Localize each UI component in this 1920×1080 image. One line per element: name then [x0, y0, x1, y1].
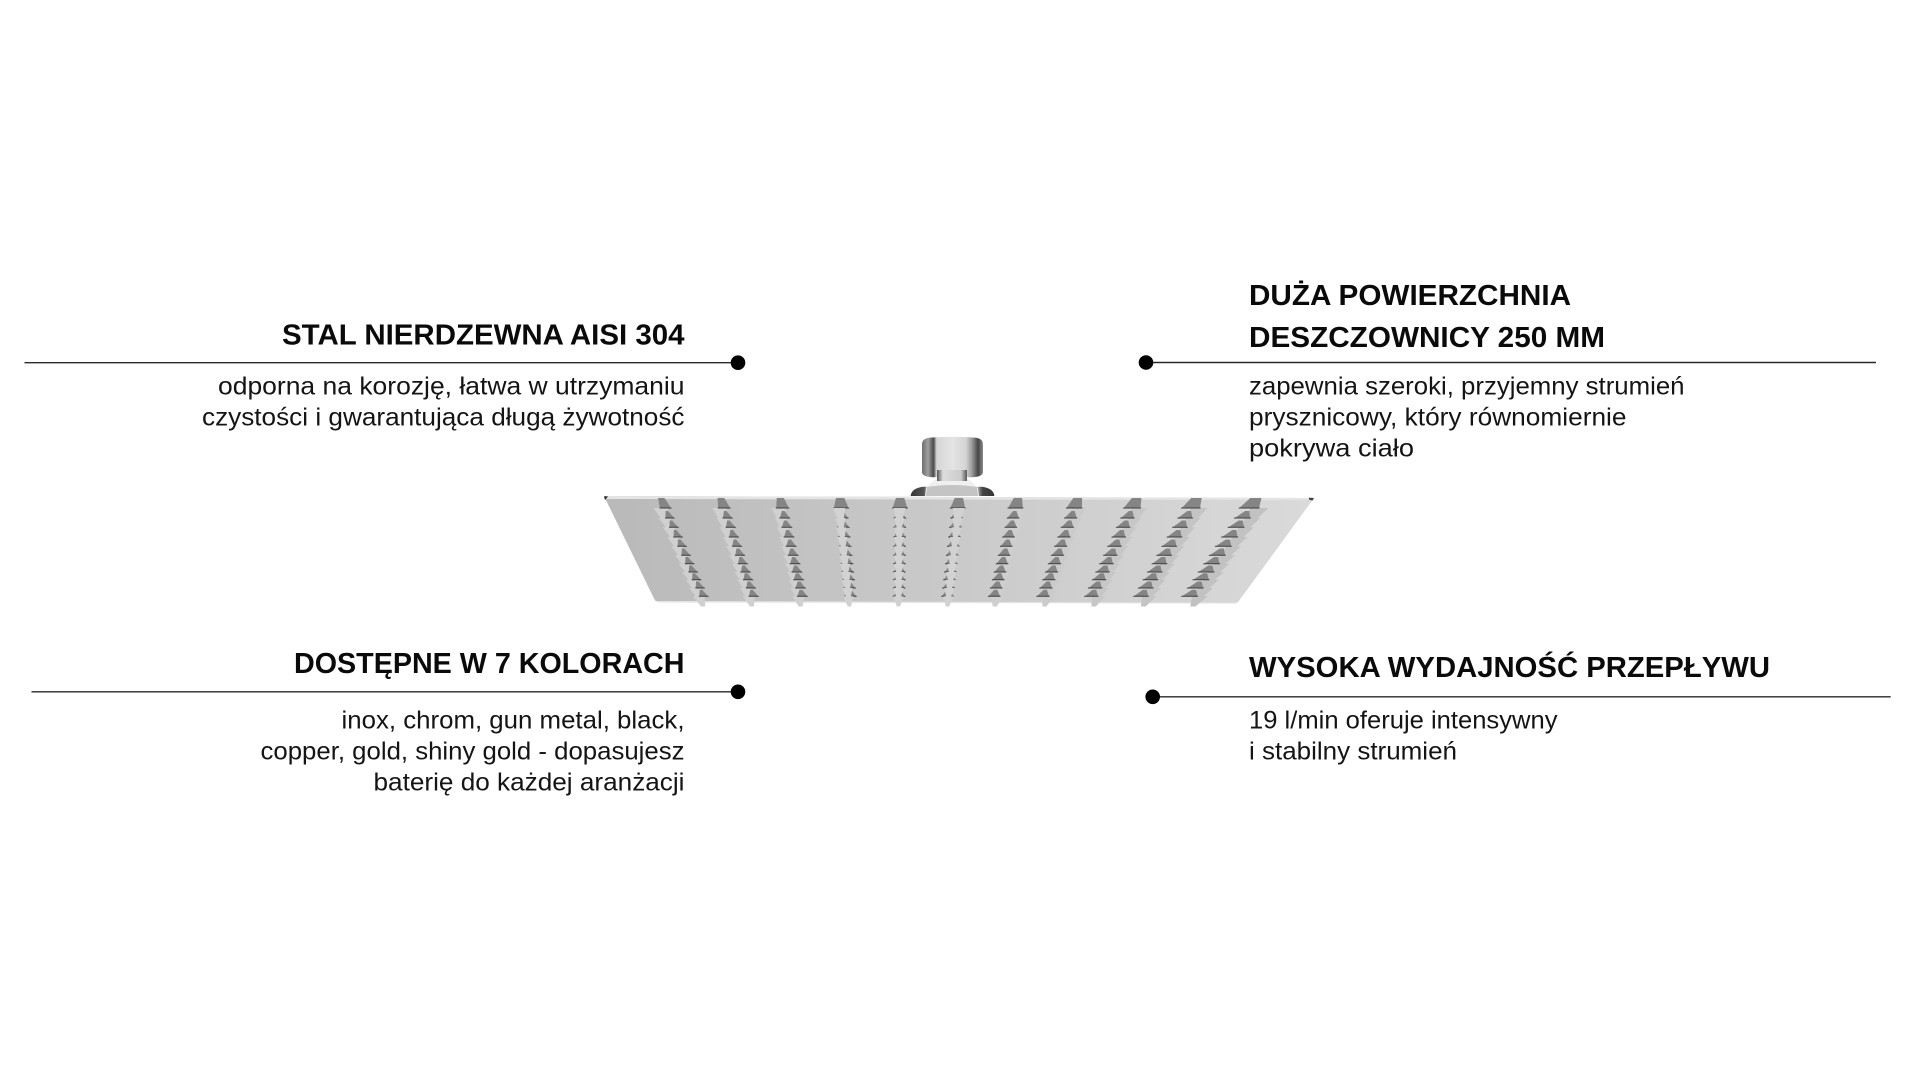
heading: STAL NIERDZEWNA AISI 304	[282, 319, 684, 351]
description: czystości i gwarantująca długą żywotność	[202, 404, 684, 432]
shower head product image	[604, 437, 1314, 606]
heading: DOSTĘPNE W 7 KOLORACH	[294, 648, 684, 680]
callout: high flow	[1145, 650, 1891, 765]
leader line with dot	[1145, 690, 1891, 704]
rain plate	[604, 496, 1314, 604]
description	[202, 372, 684, 432]
leader line with dot	[1139, 355, 1876, 370]
description: copper, gold, shiny gold - dopasujesz	[260, 737, 684, 765]
heading: WYSOKA WYDAJNOŚĆ PRZEPŁYWU	[1249, 650, 1770, 684]
connector fitting	[911, 437, 994, 496]
description: inox, chrom, gun metal, black,	[342, 706, 684, 734]
description	[260, 706, 684, 796]
description: 19 l/min oferuje intensywny	[1249, 706, 1558, 734]
description	[1249, 372, 1684, 462]
heading: DESZCZOWNICY 250 MM	[1249, 322, 1605, 354]
leader line with dot	[24, 355, 745, 370]
callout: seven colours	[32, 648, 745, 796]
description: odporna na korozję, łatwa w utrzymaniu	[218, 372, 684, 400]
leader line with dot	[32, 684, 745, 699]
heading: DUŻA POWIERZCHNIA	[1249, 280, 1571, 312]
description: i stabilny strumień	[1249, 737, 1457, 765]
callout: large surface	[1139, 280, 1876, 462]
description: zapewnia szeroki, przyjemny strumień	[1249, 372, 1684, 400]
description	[1249, 706, 1558, 765]
description: prysznicowy, który równomiernie	[1249, 404, 1626, 432]
description: pokrywa ciało	[1249, 434, 1414, 462]
description: baterię do każdej aranżacji	[374, 768, 684, 796]
heading	[1249, 280, 1605, 354]
callout: stainless steel	[24, 319, 745, 432]
nozzle rows	[654, 498, 1268, 606]
